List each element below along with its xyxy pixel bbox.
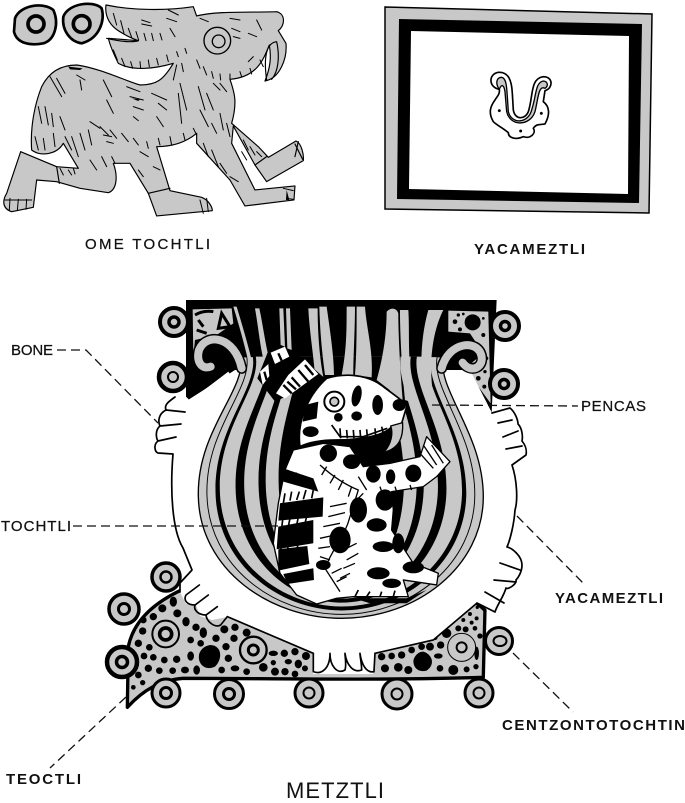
scroll: right (442, 345, 482, 369)
label: yacameztli: YACAMEZTLI (555, 590, 663, 607)
bone: lower teeth (185, 585, 484, 672)
figure: ome tochtli rabbit with two numeral dots (4, 4, 303, 216)
label: bone: BONE (11, 342, 53, 359)
scroll: left (198, 339, 242, 368)
leader lines (50, 350, 585, 768)
title: metztli: METZTLI (286, 778, 384, 803)
icon: numeral dot two (63, 4, 103, 43)
icon: numeral dot one (14, 5, 56, 44)
rings around base (107, 308, 519, 709)
figure: metztli glyph (107, 300, 527, 709)
bone: white toothed ring (155, 370, 527, 674)
corner: dotted right (448, 311, 491, 403)
pencas: upright gray stripes (233, 307, 443, 407)
top black band (186, 300, 497, 414)
label: tochtli: TOCHTLI (1, 518, 71, 535)
corner: dotted left (193, 308, 233, 357)
label: teoctli: TEOCTLI (6, 771, 81, 788)
label: pencas: PENCAS (581, 398, 646, 415)
label: ome tochtli: OME TOCHTLI (85, 236, 210, 253)
icon: yacameztli nose ornament (490, 72, 551, 138)
base with dots (127, 591, 485, 707)
tochtli figure (273, 375, 450, 604)
label: yacameztli top: YACAMEZTLI (474, 241, 585, 258)
rabbit body (4, 5, 303, 216)
rabbit ear (257, 345, 325, 402)
label: centzontotochtin: CENTZONTOTOCHTIN (502, 717, 685, 734)
panel: yacameztli frame (385, 7, 652, 213)
vessel: yacameztli concentric bands (198, 307, 483, 618)
